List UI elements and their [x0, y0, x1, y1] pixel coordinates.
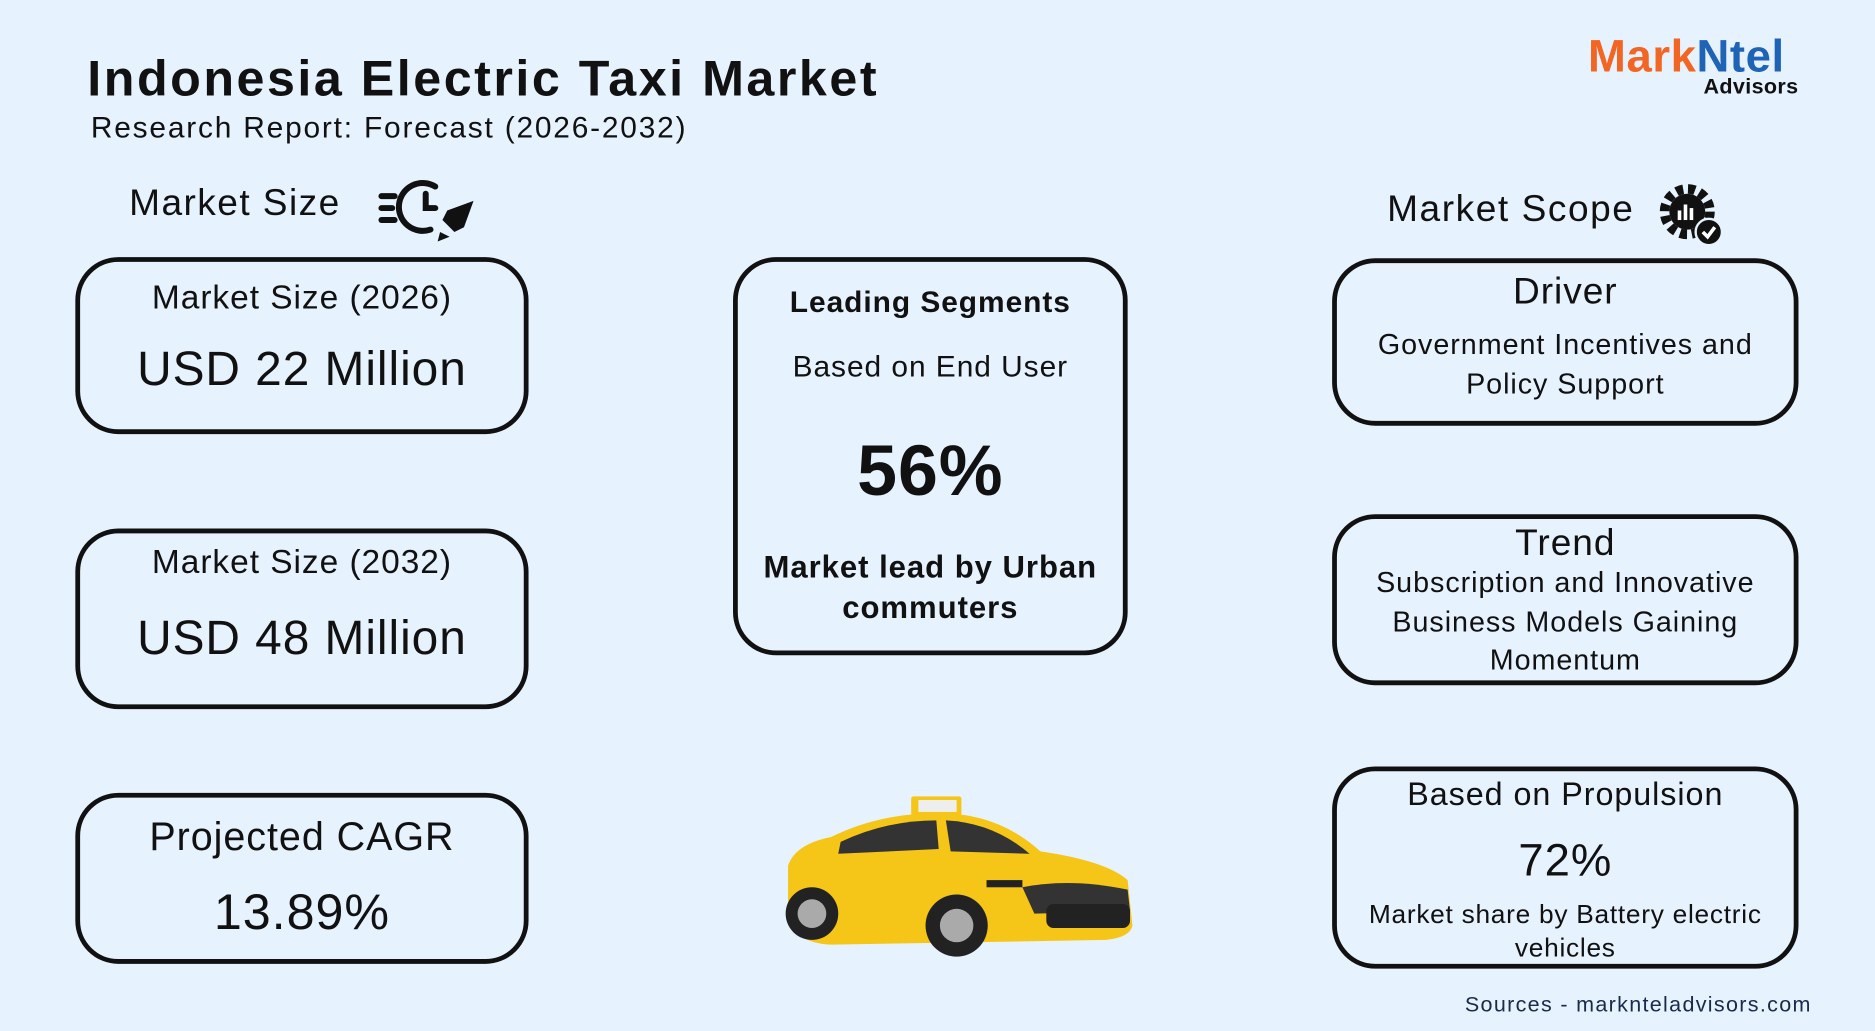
card: CAGR: Projected CAGR	[149, 814, 454, 859]
card: market size 2032: Market Size (2032)	[152, 543, 452, 580]
heading: market scope: Market Scope	[1387, 188, 1634, 230]
card: propulsion: 72%	[1518, 836, 1612, 886]
logo: Advisors	[1703, 74, 1798, 98]
icon: gear chart	[1660, 184, 1721, 244]
heading: market size: Market Size	[129, 182, 341, 224]
card: driver: Driver	[1513, 270, 1618, 312]
card: driver: Policy Support	[1466, 368, 1665, 401]
card: market size 2026: USD 22 Million	[137, 343, 467, 396]
card: trend: Trend	[1515, 521, 1615, 563]
card: trend: Momentum	[1490, 645, 1641, 677]
card: propulsion: Based on Propulsion	[1407, 776, 1723, 812]
card: market size 2032	[75, 529, 529, 709]
card: driver	[1332, 258, 1798, 426]
card: leading segments: Leading Segments	[790, 286, 1071, 319]
title: Indonesia Electric Taxi Market	[87, 50, 879, 106]
card: trend: Business Models Gaining	[1392, 606, 1738, 638]
card: propulsion	[1332, 767, 1798, 969]
subtitle: Research Report: Forecast (2026-2032)	[91, 111, 687, 145]
card: market size 2026: Market Size (2026)	[152, 279, 452, 316]
footer: sources: Sources - marknteladvisors.com	[1465, 993, 1812, 1016]
card: leading segments	[733, 257, 1128, 655]
card: driver: Government Incentives and	[1378, 329, 1753, 361]
card: propulsion: Market share by Battery electric	[1369, 899, 1762, 929]
illustration: taxi car	[786, 796, 1132, 957]
card: leading segments: Based on End User	[793, 350, 1068, 384]
card: leading segments: commuters	[842, 590, 1018, 625]
card: propulsion: vehicles	[1515, 933, 1616, 963]
card: CAGR: 13.89%	[214, 884, 390, 940]
logo: MarkNtel	[1588, 32, 1785, 83]
card: leading segments: 56%	[857, 430, 1004, 511]
card: trend	[1332, 514, 1798, 685]
icon: clock rocket	[378, 180, 474, 242]
card: trend: Subscription and Innovative	[1376, 567, 1755, 599]
card: market size 2026	[75, 257, 529, 434]
card: CAGR	[75, 793, 529, 964]
card: leading segments: Market lead by Urban	[764, 549, 1097, 585]
card: market size 2032: USD 48 Million	[137, 612, 467, 665]
